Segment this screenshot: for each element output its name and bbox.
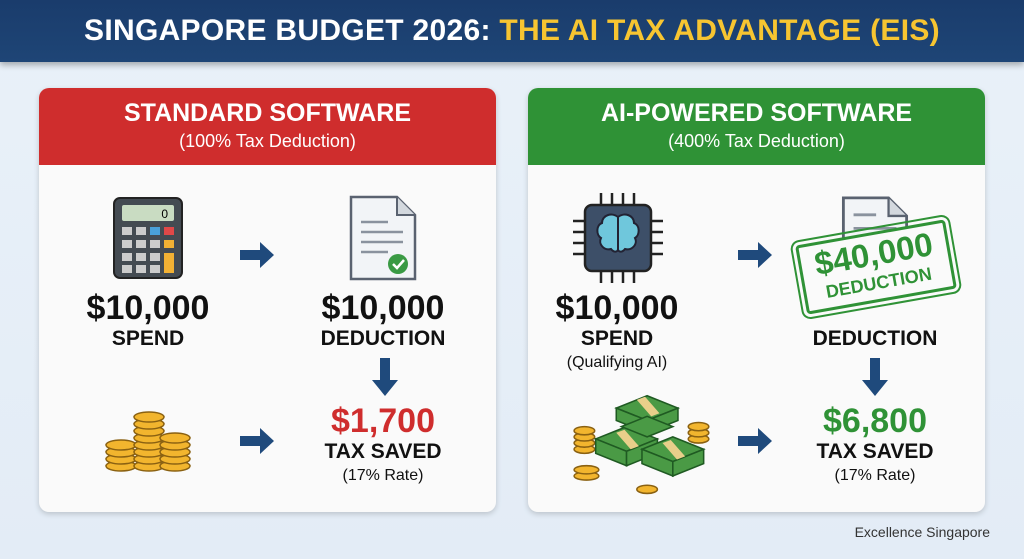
icon: money stacks xyxy=(573,394,710,494)
text: tax saved AI: (17% Rate) xyxy=(835,467,915,484)
text: spend: $10,000 xyxy=(87,289,209,327)
arrow: spend to deduction xyxy=(240,242,274,268)
text: AI deduction label: DEDUCTION xyxy=(813,327,937,350)
footer credit: Excellence Singapore xyxy=(855,524,990,540)
arrow: AI down xyxy=(862,358,888,396)
title xyxy=(0,0,1024,62)
arrow: money to saved xyxy=(738,428,772,454)
text: deduction xyxy=(321,289,445,350)
stamp: $40,000 deduction: $40,000 xyxy=(812,225,936,282)
icon: coins xyxy=(105,411,191,472)
arrow: coins to saved xyxy=(240,428,274,454)
text: deduction: DEDUCTION xyxy=(321,327,445,350)
icon: AI chip brain xyxy=(573,193,663,283)
panel header: standard: (100% Tax Deduction) xyxy=(179,131,356,151)
text: deduction: $10,000 xyxy=(322,289,444,327)
icon: calculator: 0 xyxy=(161,207,168,221)
icon: calculator xyxy=(113,197,183,279)
text: AI spend xyxy=(556,289,678,371)
text: AI spend: $10,000 xyxy=(556,289,678,327)
panel header: standard xyxy=(39,88,496,165)
icon: document with stamp xyxy=(790,196,962,319)
text: tax saved AI xyxy=(816,402,934,484)
arrow: down xyxy=(372,358,398,396)
stamp: $40,000 deduction xyxy=(795,219,957,315)
text: tax saved standard xyxy=(324,402,442,484)
text: AI spend: (Qualifying AI) xyxy=(567,354,667,371)
panel header: AI xyxy=(528,88,985,165)
arrow: AI spend to deduction xyxy=(738,242,772,268)
panel header: AI: AI-POWERED SOFTWARE xyxy=(601,99,912,127)
icon: document with check xyxy=(350,196,416,280)
text: AI spend: SPEND xyxy=(581,327,653,350)
text: spend xyxy=(87,289,209,350)
title: SINGAPORE BUDGET 2026: THE AI TAX ADVANTAGE (EIS) xyxy=(84,14,940,47)
text: tax saved standard: (17% Rate) xyxy=(343,467,423,484)
text: tax saved standard: TAX SAVED xyxy=(324,440,442,463)
stamp: $40,000 deduction: DEDUCTION xyxy=(824,264,933,302)
panel header: AI: (400% Tax Deduction) xyxy=(668,131,845,151)
text: spend: SPEND xyxy=(112,327,184,350)
panel: standard software xyxy=(39,88,496,512)
text: tax saved AI: $6,800 xyxy=(823,402,927,440)
text: tax saved standard: $1,700 xyxy=(331,402,435,440)
text: tax saved AI: TAX SAVED xyxy=(816,440,934,463)
panel: AI-powered software xyxy=(528,88,985,512)
panel header: standard: STANDARD SOFTWARE xyxy=(124,99,411,127)
